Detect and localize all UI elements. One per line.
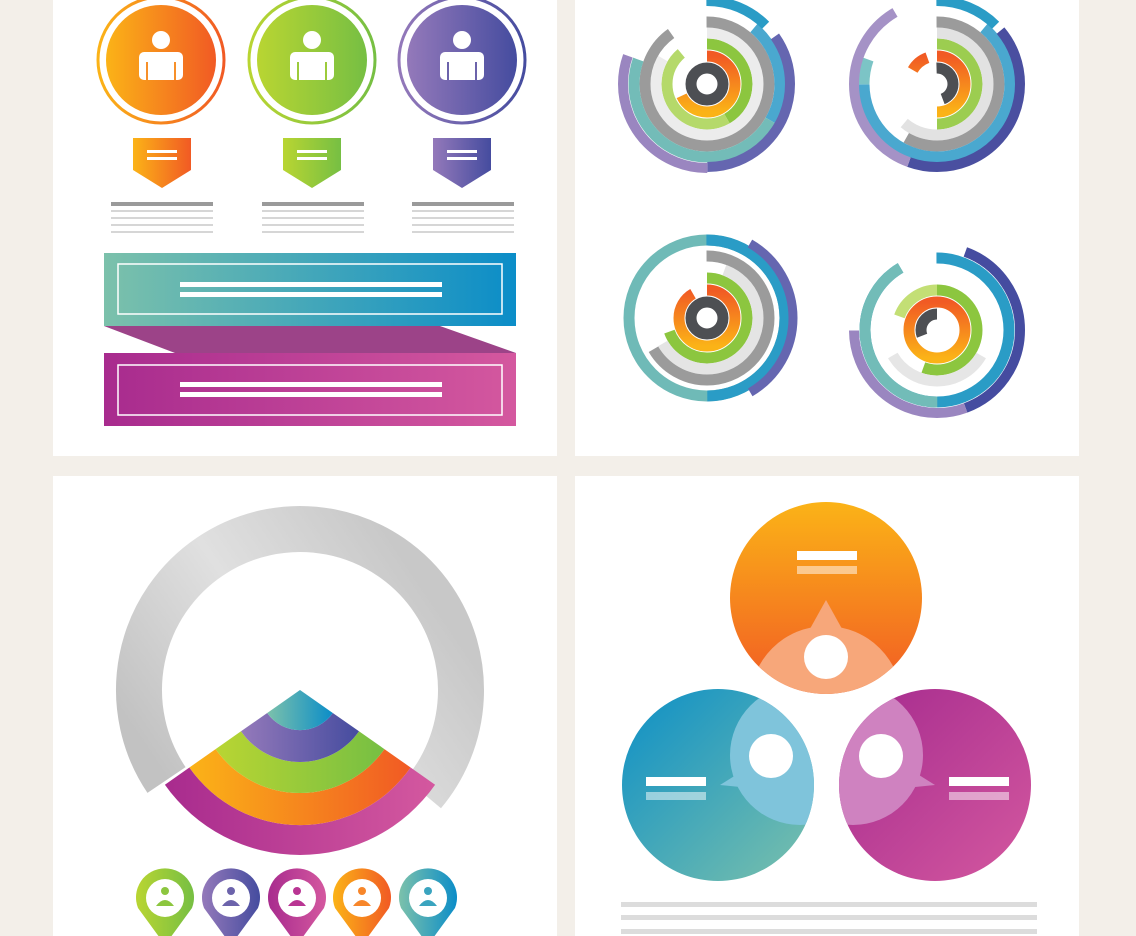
icon: pins row <box>136 868 457 936</box>
icon: green person circle <box>249 0 375 123</box>
chart: ring 1 <box>623 0 791 168</box>
chart: ring 3 <box>621 232 793 404</box>
tag: purple <box>433 138 491 188</box>
circle: orange <box>730 502 922 694</box>
ribbon: teal banner <box>104 253 516 326</box>
circle: magenta <box>839 689 1031 881</box>
tag: orange <box>133 138 191 188</box>
icon: purple person circle <box>399 0 525 123</box>
ribbon: fold <box>104 326 516 353</box>
chart: layered fan <box>165 690 435 855</box>
icon: orange person circle <box>98 0 224 123</box>
circle: teal <box>622 689 814 881</box>
chart: gray ring <box>76 466 524 914</box>
chart: ring 2 <box>854 1 1020 167</box>
chart: ring 4 <box>854 247 1020 413</box>
text lines: bottom <box>621 902 1037 934</box>
text lines: three columns <box>111 202 514 233</box>
ribbon: magenta banner <box>104 353 516 426</box>
panel: top-left people & ribbons <box>53 0 557 456</box>
panel: top-right ring charts <box>575 0 1079 456</box>
tag: green <box>283 138 341 188</box>
panel: bottom-right three circles <box>575 476 1079 936</box>
panel: bottom-left gauge & pins <box>53 466 557 936</box>
